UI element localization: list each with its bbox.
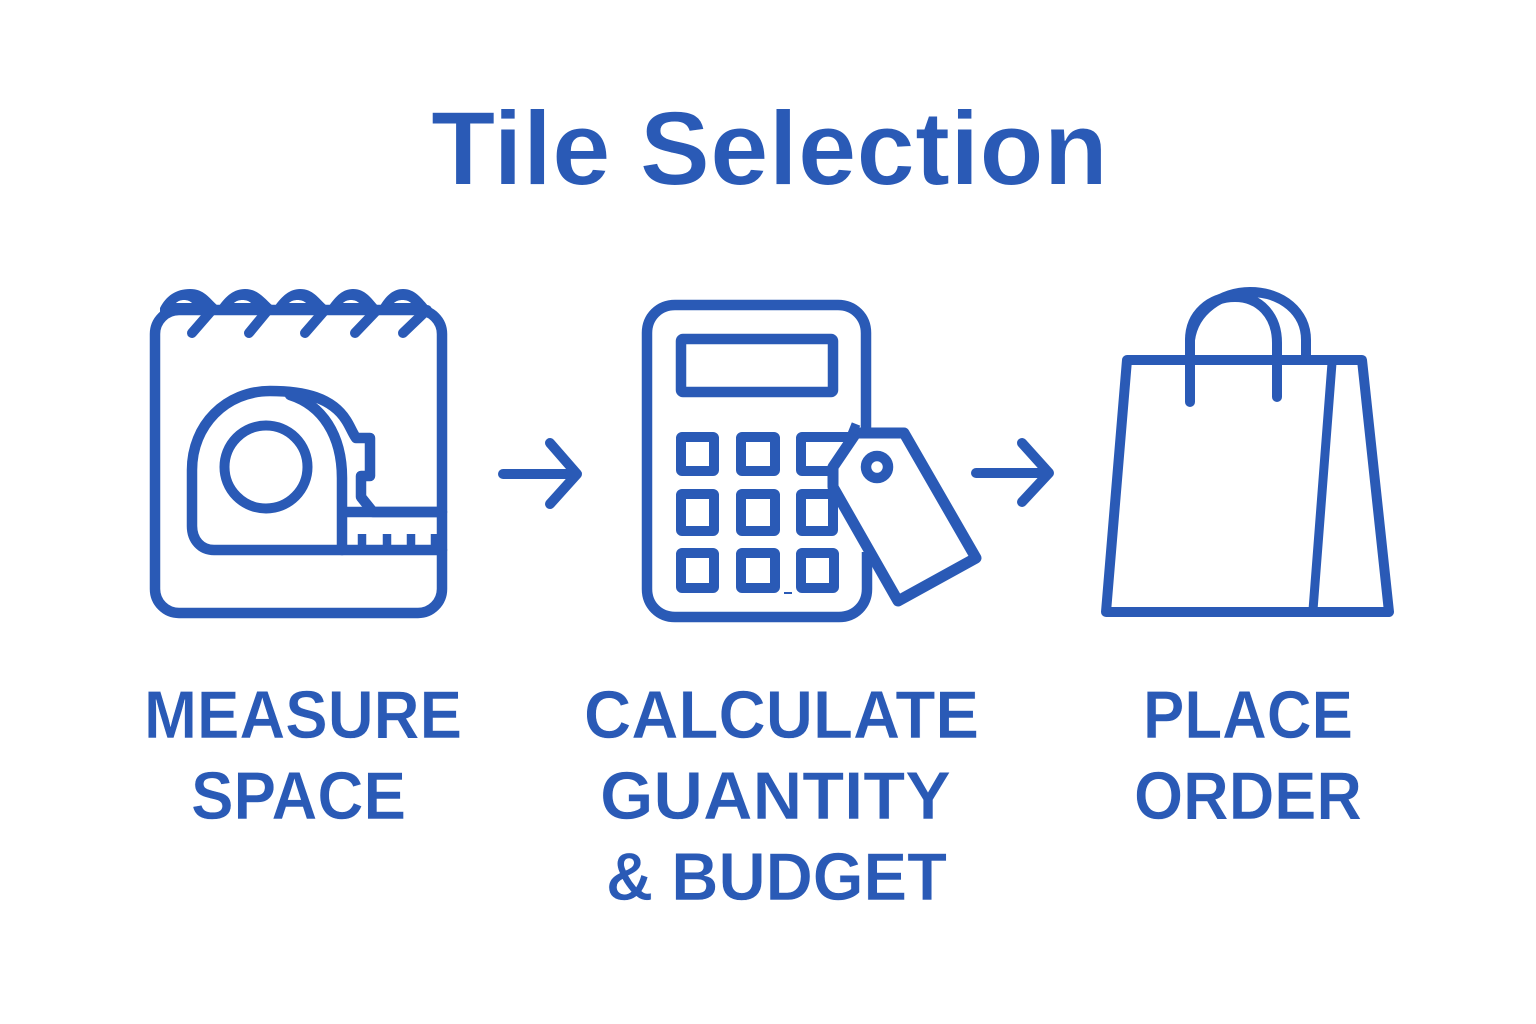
small key mark xyxy=(784,592,792,594)
label: calculate quantity and budget xyxy=(584,677,979,915)
back handle xyxy=(1190,292,1306,357)
label: measure space: SPACE xyxy=(191,758,406,834)
label: calculate quantity and budget: & BUDGET xyxy=(606,839,947,915)
step 3: place order xyxy=(1106,292,1389,612)
bag side fold xyxy=(1313,363,1332,610)
tape ruler top edge xyxy=(342,507,442,517)
spiral binding xyxy=(160,289,430,333)
bag outline xyxy=(1106,360,1389,612)
arrow 2 xyxy=(976,443,1049,502)
label: place order xyxy=(1134,677,1362,834)
title: Tile Selection xyxy=(431,90,1108,208)
label: place order: PLACE xyxy=(1143,677,1353,753)
tag loop xyxy=(852,424,856,434)
label: calculate quantity and budget: CALCULATE xyxy=(584,677,979,753)
tape measure body xyxy=(192,391,442,550)
label: place order: ORDER xyxy=(1134,758,1362,834)
step 2: calculate xyxy=(647,305,976,617)
calculator display xyxy=(681,339,833,392)
tape measure hub xyxy=(224,426,308,508)
price tag xyxy=(833,433,976,601)
calculator keys xyxy=(681,437,851,588)
calculator body xyxy=(647,305,867,617)
label: measure space xyxy=(144,677,462,834)
tape measure inner curve xyxy=(290,395,342,550)
tag hole xyxy=(866,456,888,478)
front handle xyxy=(1190,297,1277,402)
notebook page xyxy=(155,310,442,613)
icon: shopping bag xyxy=(1106,292,1389,612)
tape ruler ticks xyxy=(362,534,435,550)
label: calculate quantity and budget: GUANTITY xyxy=(600,758,951,834)
icon: notebook with tape measure xyxy=(155,289,442,613)
arrow 1 xyxy=(503,443,577,504)
icon: calculator with price tag xyxy=(647,305,976,617)
label: measure space: MEASURE xyxy=(144,677,462,753)
step 1: measure space xyxy=(155,289,442,613)
